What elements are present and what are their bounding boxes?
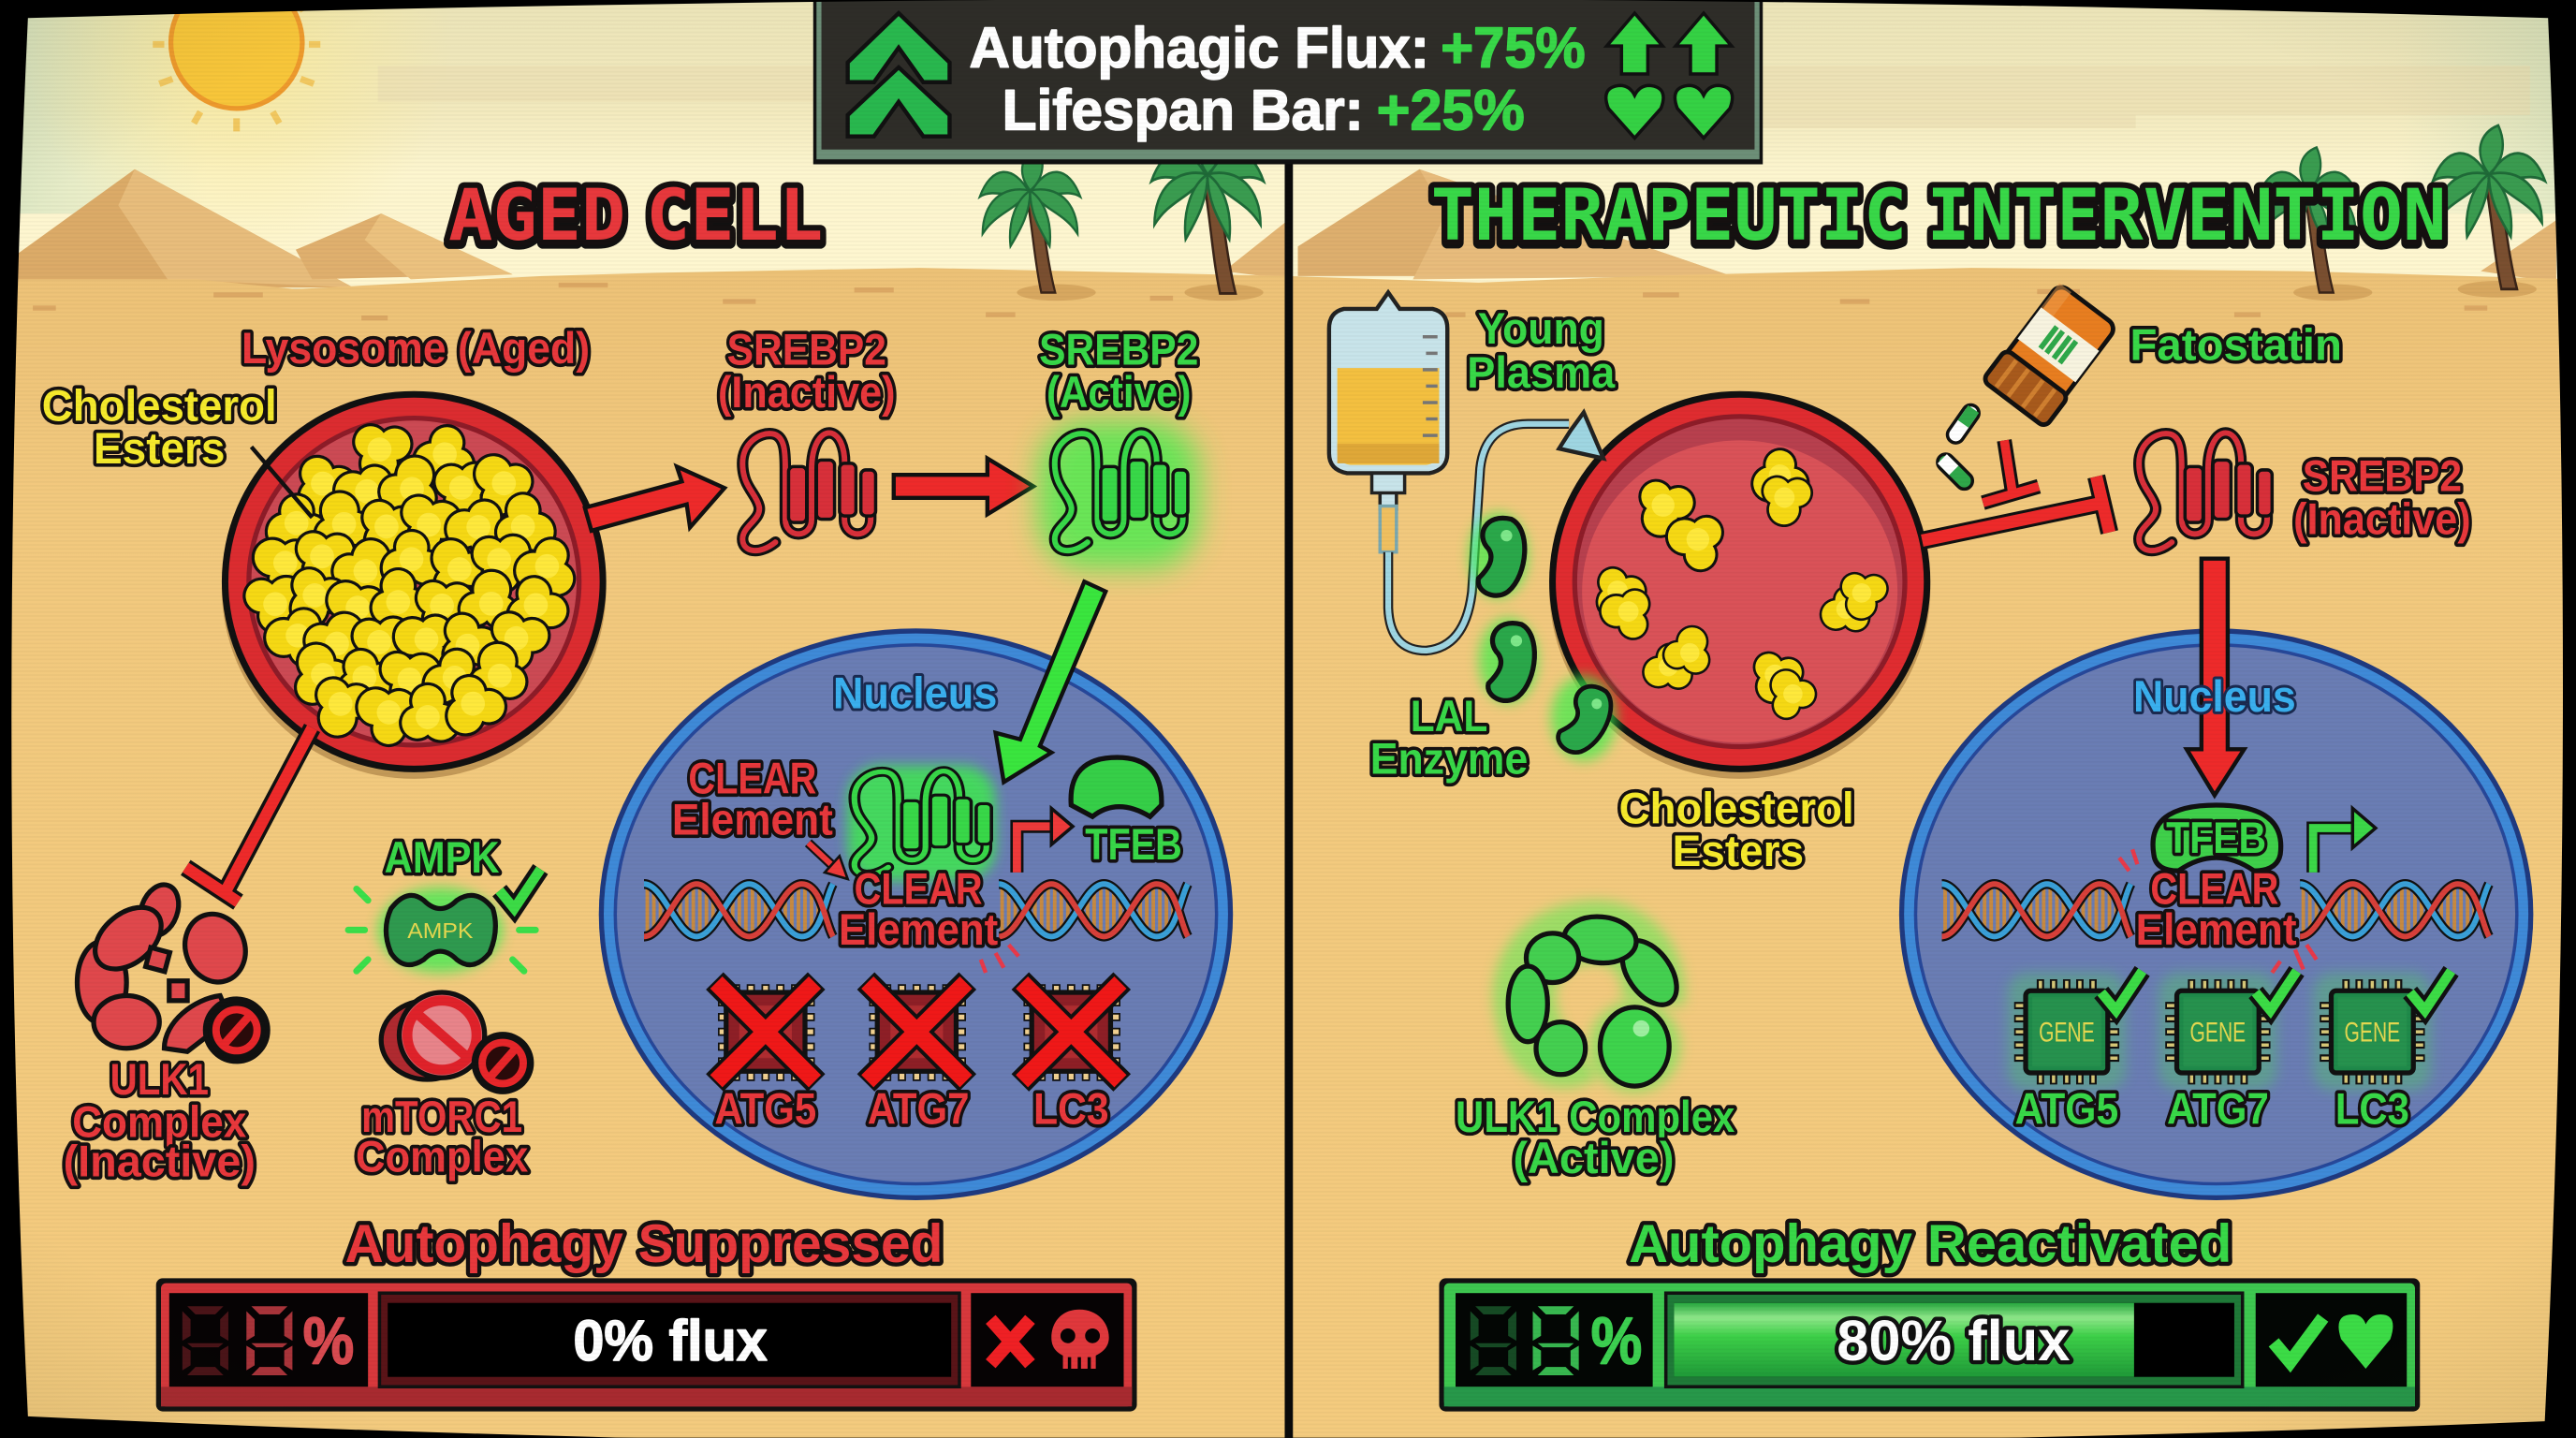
icon: up arrows <box>1606 13 1732 74</box>
label: srebp2 active: SREBP2 <box>1039 326 1198 375</box>
gene labels: ATG5 <box>714 1084 816 1134</box>
chip atg5 active: GENE <box>2039 1018 2095 1049</box>
digit readout <box>169 1293 368 1387</box>
arrow: down to nucleus <box>2187 559 2244 795</box>
label: young plasma: Plasma <box>1467 348 1616 398</box>
ulk1 active complex <box>1508 914 1688 1093</box>
label: cholesterol esters: Esters <box>94 424 225 474</box>
label: clear element: Element <box>2136 905 2297 955</box>
lysosome aged <box>222 391 607 779</box>
label: srebp2 inactive <box>718 326 896 418</box>
label: nucleus: Nucleus <box>2133 672 2296 722</box>
label: ulk1 inactive: ULK1 <box>110 1055 209 1105</box>
ampk icon: AMPK <box>407 918 473 943</box>
chip lc3 active <box>2313 971 2452 1091</box>
status bar red <box>156 1278 1137 1412</box>
label: ulk1 inactive: (Inactive) <box>64 1137 256 1187</box>
arrow: inactive to active <box>894 459 1033 514</box>
gene labels <box>714 1084 1109 1134</box>
label: cholesterol esters <box>1619 784 1854 876</box>
label: lal enzyme: LAL <box>1411 692 1487 741</box>
status: autophagy suppressed: Autophagy Suppressed <box>345 1214 943 1274</box>
label: ulk1 inactive: Complex <box>72 1097 246 1147</box>
label: clear element <box>672 755 833 845</box>
palm trees right <box>2258 125 2545 301</box>
srebp2 active <box>1038 420 1199 568</box>
gene labels: LC3 <box>2335 1084 2409 1134</box>
dna strands <box>644 884 1188 936</box>
status icons <box>2256 1293 2407 1387</box>
label: clear element: CLEAR <box>2150 864 2278 914</box>
label: young plasma: Young <box>1478 304 1604 354</box>
pyramids left <box>17 169 1288 287</box>
label: young plasma <box>1467 304 1616 398</box>
centre divider <box>1284 0 1293 1438</box>
label: mtorc1 complex <box>356 1093 528 1181</box>
icon: hearts <box>1606 85 1733 138</box>
top stats panel <box>813 0 1763 165</box>
label: clear element: CLEAR <box>688 755 816 804</box>
label: lal enzyme <box>1370 692 1528 785</box>
red marks <box>2119 849 2317 973</box>
label: mtorc1 complex: Complex <box>356 1132 528 1181</box>
label: tfeb: TFEB <box>1085 820 1182 870</box>
dna strands <box>1942 884 2489 936</box>
cholesterol esters cluster <box>236 418 579 759</box>
label: ulk1 complex active: ULK1 Complex <box>1456 1093 1734 1142</box>
gene labels: ATG7 <box>868 1084 970 1134</box>
label: ulk1 complex active: (Active) <box>1513 1134 1674 1183</box>
small inhibition mark <box>1983 440 2039 503</box>
flux bar: 80% flux <box>1837 1309 2070 1373</box>
small arrow <box>809 843 848 879</box>
label: clear element center <box>839 864 998 955</box>
label: fatostatin: Fatostatin <box>2130 320 2342 370</box>
stat: autophagic flux: +75% <box>1441 16 1586 81</box>
status: autophagy reactivated: Autophagy Reactivated <box>1629 1214 2232 1274</box>
label: cholesterol esters <box>42 381 277 474</box>
chip atg5 blocked <box>714 981 816 1083</box>
status icons <box>971 1293 1123 1387</box>
chip atg7 blocked <box>866 981 968 1083</box>
red marks <box>981 945 1018 973</box>
palm trees left <box>980 124 1264 301</box>
pyramids right <box>1298 169 2556 283</box>
digit readout: % <box>303 1304 354 1378</box>
label: clear element <box>2136 864 2297 955</box>
label: ampk: AMPK <box>385 833 500 883</box>
label: srebp2 inactive: SREBP2 <box>2303 452 2462 502</box>
panel: therapeutic intervention <box>1329 174 2533 1412</box>
gene labels <box>2015 1084 2409 1134</box>
label: srebp2 inactive: (Inactive) <box>718 368 896 418</box>
label: lal enzyme: Enzyme <box>1370 735 1528 785</box>
label: cholesterol esters: Esters <box>1673 827 1804 876</box>
chip atg5 active <box>2008 971 2143 1091</box>
tfeb blob bound <box>2153 805 2281 871</box>
gene labels: LC3 <box>1033 1084 1109 1134</box>
label: srebp2 inactive: SREBP2 <box>727 326 886 375</box>
label: ulk1 complex active <box>1456 1093 1734 1183</box>
digit readout: % <box>1591 1304 1642 1378</box>
label: cholesterol esters: Cholesterol <box>42 381 277 431</box>
chip atg7 active <box>2159 971 2297 1091</box>
label: clear element center: CLEAR <box>855 864 983 914</box>
flux bar: 0% flux <box>574 1309 768 1373</box>
label: srebp2 inactive: (Inactive) <box>2293 494 2471 544</box>
stat: lifespan bar: Lifespan Bar: <box>1003 79 1364 143</box>
label: srebp2 active <box>1039 326 1198 418</box>
tfeb blob <box>1071 757 1162 816</box>
srebp2 inactive <box>742 433 875 550</box>
title: aged cell: AGED CELL <box>448 174 823 257</box>
chip lc3 active: GENE <box>2345 1018 2400 1049</box>
status bar green <box>1439 1278 2420 1412</box>
bottle fatostatin <box>1983 281 2120 428</box>
flux bar <box>379 1293 959 1387</box>
bent arrow green <box>2313 808 2376 873</box>
lal enzymes <box>1469 513 1617 761</box>
mtorc1 icon <box>381 992 534 1094</box>
main inhibition line <box>1922 477 2110 540</box>
nucleus right <box>1899 628 2533 1200</box>
gene labels: ATG7 <box>2167 1084 2269 1134</box>
ulk1 broken complex <box>77 879 268 1062</box>
stat: autophagic flux: Autophagic Flux: <box>970 16 1429 81</box>
iv bag young plasma <box>1329 292 1447 552</box>
srebp2 in nucleus <box>848 766 996 881</box>
label: srebp2 inactive <box>2293 452 2471 544</box>
label: cholesterol esters: Cholesterol <box>1619 784 1854 833</box>
label: srebp2 active: (Active) <box>1046 368 1191 418</box>
label: lysosome aged: Lysosome (Aged) <box>242 324 590 374</box>
ampk icon <box>348 869 540 973</box>
title: therapeutic intervention: THERAPEUTIC INTERVENTION <box>1431 174 2446 257</box>
inhibition line <box>185 727 312 902</box>
icon: double chevron <box>848 13 949 137</box>
stat: lifespan bar: +25% <box>1377 79 1525 143</box>
arrow: green to nucleus <box>996 581 1105 782</box>
srebp2 inactive <box>2139 433 2272 550</box>
label: clear element: Element <box>672 796 833 845</box>
chip atg7 active: GENE <box>2190 1018 2246 1049</box>
panel: aged cell <box>42 174 1233 1412</box>
nucleus left <box>599 628 1233 1200</box>
gene labels: ATG5 <box>2015 1084 2118 1134</box>
lysosome treated <box>1549 391 1930 779</box>
label: nucleus: Nucleus <box>833 668 997 718</box>
sun <box>153 0 320 131</box>
digit readout <box>1456 1293 1653 1387</box>
arrow: lysosome to srebp2 <box>585 466 724 531</box>
label: ulk1 inactive <box>64 1055 256 1187</box>
bent arrow <box>1017 808 1073 873</box>
chip lc3 blocked <box>1020 981 1122 1083</box>
label: mtorc1 complex: mTORC1 <box>361 1093 522 1142</box>
label: clear element center: Element <box>839 905 998 955</box>
pills <box>1934 402 1983 492</box>
iv tube and arrow <box>1388 413 1603 651</box>
flux bar <box>1666 1293 2243 1387</box>
remaining cholesterol clusters <box>1582 441 1891 726</box>
tfeb blob bound: TFEB <box>2166 814 2266 863</box>
